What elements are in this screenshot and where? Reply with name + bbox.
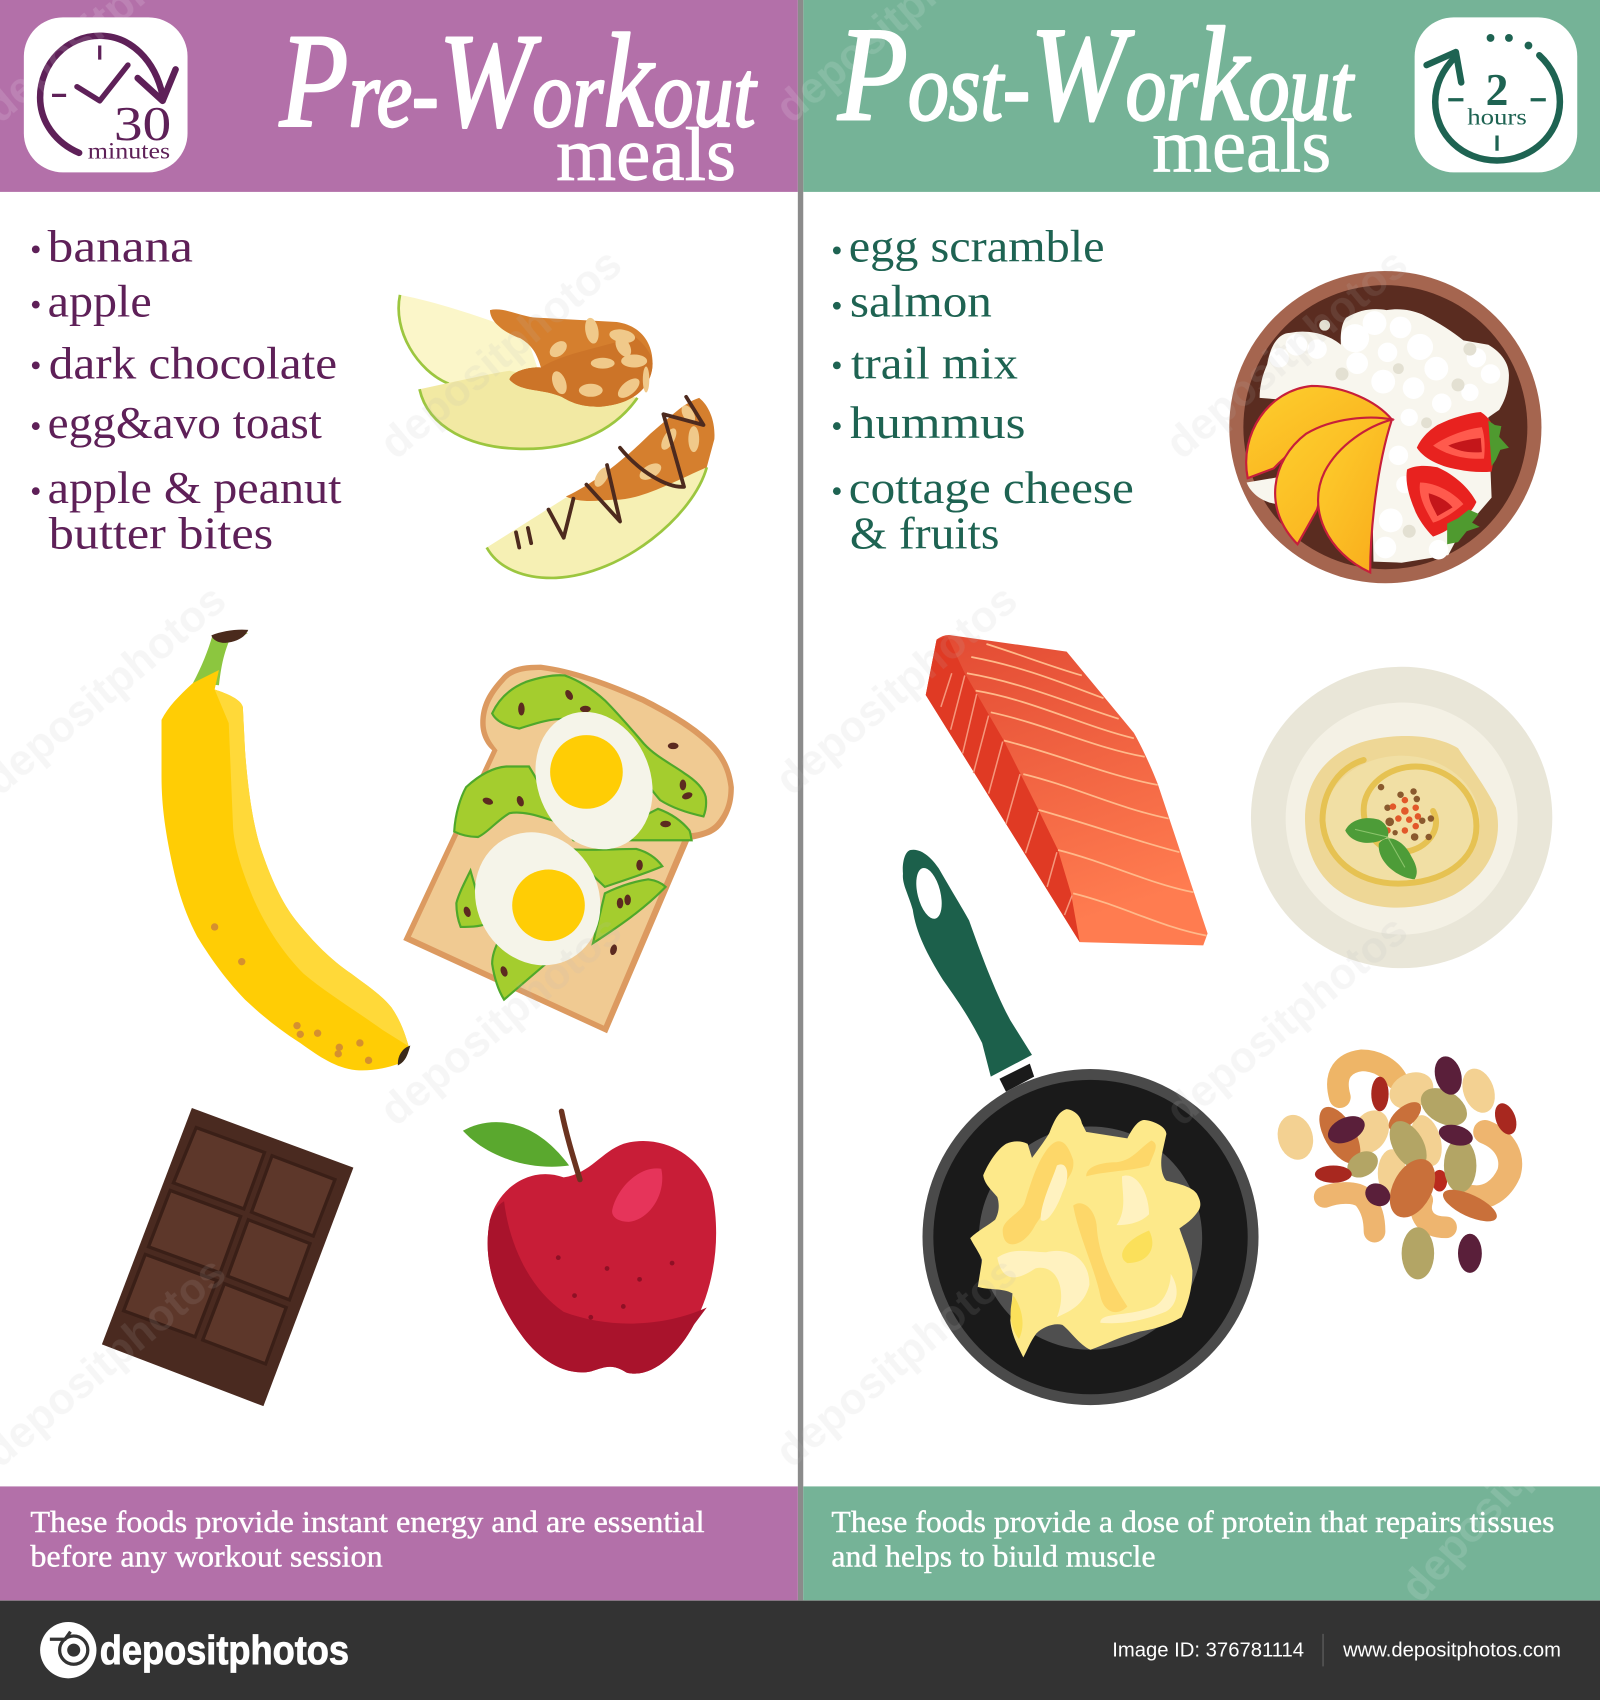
illustration: salmon fillet bbox=[926, 635, 1208, 945]
watermark overlays: depositphotos bbox=[371, 240, 631, 468]
icon: 30 minutes clock: minutes bbox=[88, 138, 170, 163]
heading: post meals: meals bbox=[1152, 104, 1331, 188]
panel: depositphotos footer bar bbox=[0, 1600, 1600, 1700]
panel: pre-workout footer note: before any workout session bbox=[30, 1540, 383, 1574]
panel: pre-workout header bbox=[0, 0, 798, 197]
text block: post-workout food list: trail mix bbox=[851, 337, 1018, 388]
text block: pre-workout food list bbox=[32, 220, 342, 559]
icon: 2 hours clock bbox=[1415, 17, 1577, 172]
icon: 30 minutes clock: 30 bbox=[114, 97, 171, 151]
panel: pre-workout footer note: These foods provide instant energy and are essential bbox=[30, 1505, 705, 1539]
panel: post-workout footer note bbox=[803, 1486, 1600, 1600]
text block: post-workout food list: cottage cheese bbox=[849, 462, 1134, 513]
text block: post-workout food list: salmon bbox=[850, 276, 992, 327]
illustration: egg scramble pan bbox=[903, 850, 1259, 1405]
text block: pre-workout food list: dark chocolate bbox=[49, 337, 337, 388]
illustration: cottage cheese and fruit bowl bbox=[1229, 271, 1541, 583]
logo wordmark: depositphotos bbox=[100, 1627, 349, 1673]
text block: pre-workout food list: apple & peanut bbox=[48, 462, 342, 513]
text block: pre-workout food list: butter bites bbox=[49, 508, 273, 559]
website url: www.depositphotos.com bbox=[1342, 1639, 1561, 1662]
text block: post-workout food list: hummus bbox=[850, 397, 1025, 448]
icon: 2 hours clock: hours bbox=[1467, 105, 1527, 130]
panel: pre-workout footer note bbox=[0, 1486, 798, 1600]
panel: post-workout header bbox=[803, 0, 1600, 192]
illustration: banana bbox=[162, 630, 409, 1070]
watermark overlays: depositphotos bbox=[1157, 906, 1417, 1135]
watermark overlays: depositphotos bbox=[371, 906, 631, 1135]
illustration: apple and peanut butter bites bbox=[399, 295, 714, 578]
illustration: hummus plate bbox=[1251, 667, 1552, 968]
illustration: egg and avocado toast bbox=[403, 665, 734, 1033]
illustration: trail mix bbox=[1273, 1053, 1520, 1279]
heading: meals: meals bbox=[556, 113, 736, 197]
heading: Post-Workout: Post-Workout bbox=[837, 0, 1355, 149]
text block: post-workout food list bbox=[833, 220, 1134, 559]
text block: pre-workout food list: apple bbox=[48, 276, 152, 327]
panel: post-workout footer note: These foods provide a dose of protein that repairs tissues bbox=[831, 1505, 1554, 1539]
text block: pre-workout food list: egg&avo toast bbox=[48, 397, 322, 448]
watermark overlays: depositphotos bbox=[767, 1248, 1027, 1477]
watermark overlays: depositphotos bbox=[1157, 240, 1417, 468]
icon: 30 minutes clock bbox=[24, 17, 188, 172]
panel: post-workout footer note: and helps to biuld muscle bbox=[831, 1540, 1156, 1574]
text block: post-workout food list: egg scramble bbox=[849, 220, 1105, 271]
watermark overlays: depositphotos bbox=[767, 576, 1027, 805]
icon: camera logo bbox=[40, 1622, 96, 1678]
text block: pre-workout food list: banana bbox=[48, 220, 193, 271]
text block: post-workout food list: & fruits bbox=[850, 508, 999, 559]
illustration: red apple bbox=[463, 1111, 716, 1374]
illustration: dark chocolate bar bbox=[102, 1108, 353, 1406]
image id: Image ID: 376781114 bbox=[1112, 1639, 1304, 1662]
icon: 2 hours clock: 2 bbox=[1486, 64, 1508, 115]
heading: Pre-Workout: Pre-Workout bbox=[279, 7, 758, 156]
